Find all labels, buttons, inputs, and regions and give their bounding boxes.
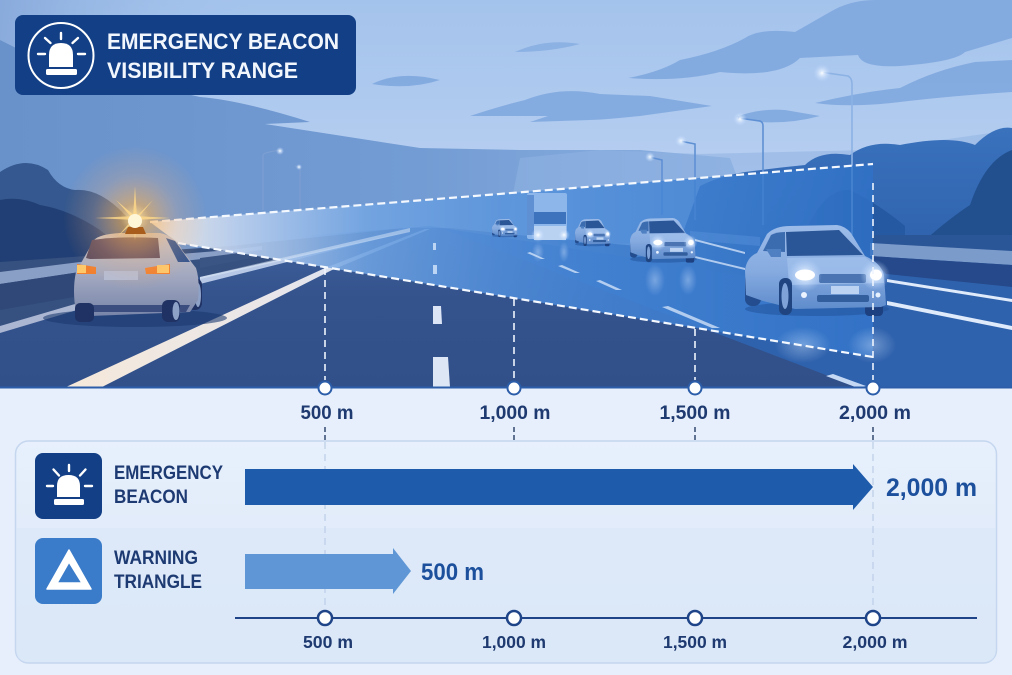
label: BEACON <box>114 487 188 508</box>
upper scale section <box>0 382 1012 675</box>
road markings <box>0 229 1012 388</box>
emergency beacon glow <box>63 146 207 290</box>
title text: EMERGENCY BEACON <box>107 29 339 54</box>
upper scale marker 500 m: 500 m <box>300 403 354 424</box>
light reflections <box>532 242 896 363</box>
distant cloud mass <box>0 40 760 260</box>
right guardrail <box>690 231 1012 287</box>
main oncoming car <box>745 225 890 316</box>
car with beacon <box>43 146 227 327</box>
upper scale marker 500 m <box>300 382 354 424</box>
upper scale marker 1,000 m <box>480 382 550 424</box>
road scene photo <box>0 0 1012 388</box>
label: EMERGENCY <box>114 463 223 484</box>
lower scale axis <box>235 611 977 652</box>
car 2 <box>630 218 697 263</box>
panel: comparison <box>16 441 996 663</box>
upper scale marker 1,500 m: 1,500 m <box>660 403 730 424</box>
icon: beacon <box>35 453 102 519</box>
upper scale marker 2,000 m <box>839 382 911 424</box>
car 3 <box>575 219 611 246</box>
label: TRIANGLE <box>114 572 202 593</box>
clouds <box>372 0 1012 122</box>
title text: VISIBILITY RANGE <box>107 58 298 83</box>
label: WARNING <box>114 548 198 569</box>
icon: beacon in circle <box>28 23 94 88</box>
trees left <box>0 163 165 280</box>
drop lines to photo markers <box>325 183 873 380</box>
beam outline dashes <box>150 164 873 357</box>
hills right <box>660 128 1012 295</box>
left guardrail <box>0 246 262 310</box>
truck <box>527 193 570 242</box>
visibility beam cone <box>150 164 873 357</box>
value: 500 m <box>421 559 484 586</box>
lower scale axis: 1,000 m <box>482 632 546 652</box>
bar arrow: 2,000 m <box>245 464 873 510</box>
row: warning triangle <box>35 538 484 604</box>
distant traffic <box>492 193 896 363</box>
bar arrow: 500 m <box>245 548 411 594</box>
title badge <box>15 15 356 95</box>
far car small <box>492 219 518 237</box>
lower scale axis: 500 m <box>303 632 353 652</box>
lower scale axis: 2,000 m <box>842 632 908 652</box>
value: 2,000 m <box>886 474 977 502</box>
street lamps <box>263 72 852 235</box>
upper scale marker 1,000 m: 1,000 m <box>480 403 550 424</box>
icon: triangle <box>35 538 102 604</box>
upper scale marker 2,000 m: 2,000 m <box>839 403 911 424</box>
road surface <box>0 228 1012 388</box>
upper scale marker 1,500 m <box>660 382 730 424</box>
lower scale axis: 1,500 m <box>663 632 727 652</box>
left ground <box>0 228 405 326</box>
row: emergency beacon <box>35 453 977 519</box>
